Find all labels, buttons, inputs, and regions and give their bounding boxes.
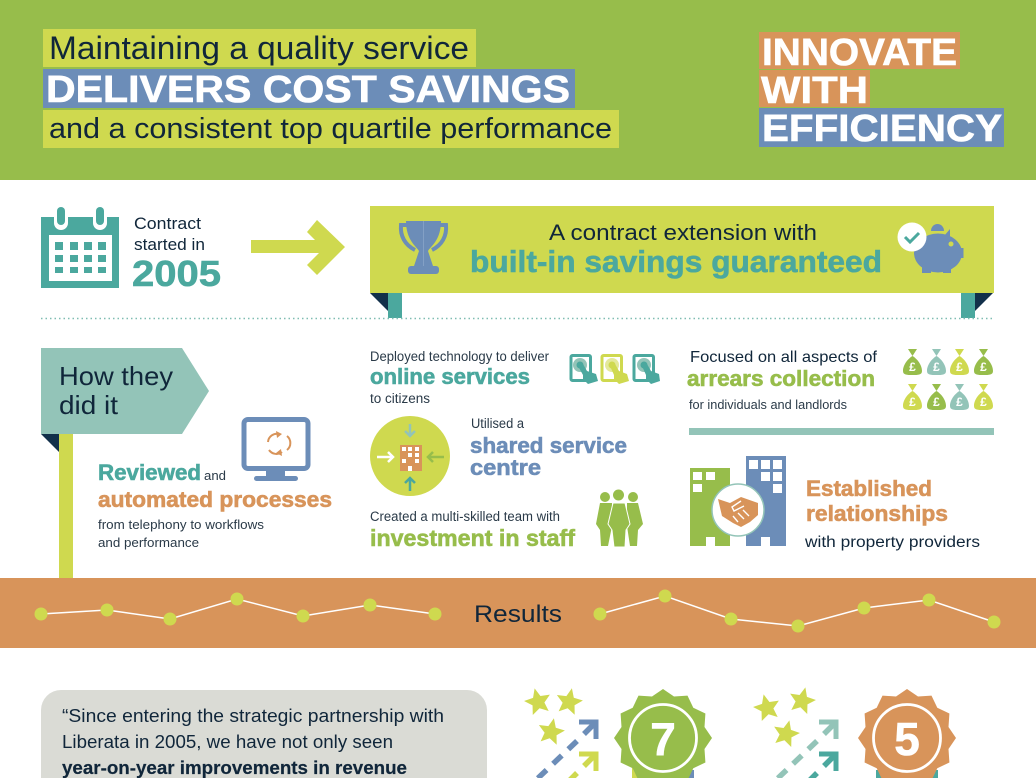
icon: money bags: £ bbox=[980, 395, 987, 409]
text: reviewed and automated processes: and performance bbox=[98, 535, 199, 550]
icon: piggy bank bbox=[898, 222, 964, 273]
icon: badge 5 bbox=[858, 689, 956, 778]
icon: badge 5: 5 bbox=[894, 713, 920, 765]
line chart: right bbox=[594, 590, 1000, 632]
text: shared service centre: Utilised a bbox=[471, 416, 524, 431]
icon: trophy bbox=[401, 221, 446, 274]
text: shared service centre bbox=[470, 416, 627, 480]
icon: money bags: £ bbox=[909, 395, 916, 409]
panel: quote bbox=[41, 690, 487, 778]
campaign title: EFFICIENCY bbox=[762, 108, 1002, 150]
text: reviewed and automated processes: and bbox=[204, 468, 226, 483]
icon: badge 7: 7 bbox=[650, 713, 676, 765]
campaign title bbox=[759, 32, 1004, 150]
icon: calendar bbox=[41, 207, 119, 288]
text: contract started: 2005 bbox=[132, 253, 221, 294]
icon: touch tablets bbox=[571, 356, 660, 384]
campaign title: INNOVATE bbox=[762, 32, 957, 74]
text: reviewed and automated processes bbox=[98, 460, 332, 550]
campaign title: WITH bbox=[761, 70, 868, 112]
text: online services: online services bbox=[370, 364, 530, 389]
icon: shared service centre bbox=[370, 416, 450, 496]
heading: contract extension: A contract extension with bbox=[549, 220, 817, 245]
icon: money bags: £ bbox=[909, 360, 916, 374]
line chart: left bbox=[34, 592, 442, 626]
icon: money bags: £ bbox=[956, 360, 963, 374]
icon: money bags: £ bbox=[933, 395, 940, 409]
text: contract started: started in bbox=[134, 236, 205, 254]
text: arrears collection: Focused on all aspects of bbox=[690, 349, 878, 366]
icon: buildings and handshake bbox=[690, 456, 786, 546]
panel: quote: year-on-year improvements in revenue bbox=[62, 758, 407, 778]
title: DELIVERS COST SAVINGS bbox=[46, 69, 570, 111]
text: established relationships bbox=[804, 476, 980, 551]
text: shared service centre: centre bbox=[470, 455, 541, 480]
text: shared service centre: shared service bbox=[470, 433, 627, 458]
icon: stars and arrows right bbox=[751, 684, 836, 778]
icon: money bags: £ bbox=[980, 360, 987, 374]
icon: money bags: £ bbox=[956, 395, 963, 409]
text: reviewed and automated processes: from telephony to workflows bbox=[98, 517, 265, 532]
panel: quote: “Since entering the strategic partnership with bbox=[62, 706, 444, 726]
title: and a consistent top quartile performance bbox=[49, 113, 612, 145]
title: Maintaining a quality service bbox=[49, 30, 469, 66]
panel: how they did it: How they bbox=[59, 361, 173, 391]
panel: contract extension banner bbox=[370, 206, 994, 318]
text: online services: to citizens bbox=[370, 391, 430, 406]
icon: team bbox=[596, 490, 643, 547]
text: established relationships: Established bbox=[806, 476, 932, 501]
text: reviewed and automated processes: automated processes bbox=[98, 487, 332, 512]
icon: money bags bbox=[903, 349, 993, 410]
arrow bbox=[251, 220, 345, 275]
heading: built-in savings guaranteed: built-in savings guaranteed bbox=[470, 244, 882, 279]
title bbox=[43, 29, 619, 148]
text: online services bbox=[370, 348, 549, 406]
panel: how they did it: did it bbox=[59, 390, 119, 420]
text: arrears collection bbox=[687, 349, 878, 412]
panel: how they did it bbox=[41, 348, 209, 578]
text: online services: Deployed technology to deliver bbox=[370, 348, 549, 364]
text: investment in staff bbox=[370, 509, 575, 551]
text: arrears collection: for individuals and landlords bbox=[689, 397, 847, 412]
icon: money bags: £ bbox=[933, 360, 940, 374]
heading: results: Results bbox=[474, 601, 562, 628]
text: investment in staff: Created a multi-skilled team with bbox=[370, 509, 560, 524]
icon: monitor bbox=[244, 420, 308, 481]
text: arrears collection: arrears collection bbox=[687, 366, 875, 391]
panel: results band bbox=[0, 578, 1036, 648]
icon: stars and arrows left bbox=[522, 685, 596, 778]
text: established relationships: relationships bbox=[806, 501, 948, 526]
text: contract started: Contract bbox=[134, 215, 201, 233]
panel: quote: Liberata in 2005, we have not only seen bbox=[62, 732, 393, 752]
text: investment in staff: investment in staff bbox=[370, 525, 575, 551]
panel: header bbox=[0, 0, 1036, 180]
text: established relationships: with property providers bbox=[804, 534, 980, 551]
icon: badge 7 bbox=[614, 689, 712, 778]
text: contract started bbox=[132, 215, 221, 294]
text: reviewed and automated processes: Reviewed bbox=[98, 460, 201, 485]
